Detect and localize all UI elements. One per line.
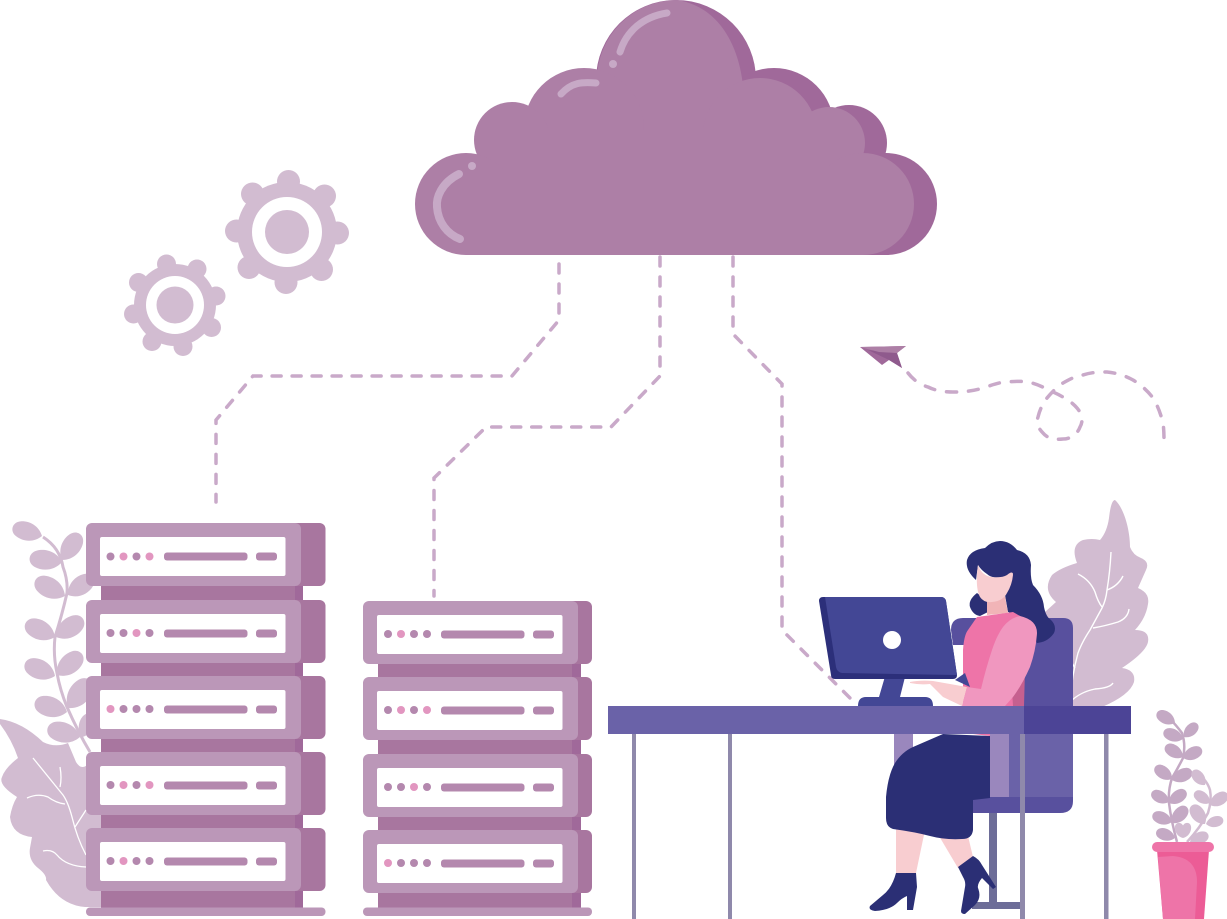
desk <box>608 706 1131 919</box>
plant: large leaf behind chair <box>1045 500 1148 707</box>
chair post and foot <box>972 810 1020 909</box>
cloud front <box>415 0 914 255</box>
potted plant <box>1149 707 1227 919</box>
left stack connector column <box>101 585 303 908</box>
plant leaves <box>1149 707 1204 844</box>
left stack base <box>86 908 326 916</box>
boot: left <box>870 873 917 911</box>
computer monitor <box>819 597 957 706</box>
middle unit 1 <box>363 601 592 664</box>
left unit 4 <box>86 752 326 815</box>
desk top left <box>608 706 1024 734</box>
monitor screen <box>825 597 957 675</box>
desk top right <box>1024 706 1131 734</box>
gear: large <box>225 170 349 294</box>
chair backrest lower <box>1009 734 1073 797</box>
gear: small <box>124 254 226 356</box>
monitor logo dot <box>883 631 901 649</box>
server stack: left <box>86 523 326 916</box>
forearm and hand <box>910 681 967 706</box>
leg: front <box>896 826 925 873</box>
chair <box>894 618 1073 909</box>
middle stack base <box>363 908 592 916</box>
face <box>977 565 1013 602</box>
left unit 3 <box>86 676 326 739</box>
plant stems <box>1169 719 1211 842</box>
pot highlight <box>1158 856 1197 919</box>
sleeve <box>962 616 1037 706</box>
blouse torso <box>963 612 1024 706</box>
chair seat <box>973 797 1073 813</box>
left unit 5 <box>86 828 326 891</box>
blouse under desk <box>973 734 990 736</box>
server stack: middle <box>363 601 592 916</box>
left unit 1 <box>86 523 326 586</box>
middle unit 4 <box>363 830 592 893</box>
monitor screen edge <box>819 597 957 679</box>
desk legs <box>632 734 1108 919</box>
plant: left large leaf <box>0 719 102 907</box>
dashed connector lines <box>216 257 850 698</box>
keyboard hint behind arm <box>955 673 970 687</box>
pot rim <box>1152 842 1214 852</box>
connector to computer <box>733 257 850 698</box>
chair light panels <box>894 734 1009 797</box>
plane trail <box>908 372 1164 442</box>
middle stack connector column <box>378 663 581 908</box>
middle unit 2 <box>363 677 592 740</box>
hair <box>967 541 1055 643</box>
chair backrest upper <box>951 618 1073 710</box>
neck <box>987 596 1008 615</box>
connector to middle server stack <box>434 257 660 596</box>
left unit 2 <box>86 600 326 663</box>
boot: right <box>958 856 996 914</box>
lower-left hair <box>970 593 990 616</box>
leg: back <box>939 836 973 868</box>
cloud highlights <box>437 13 667 239</box>
woman <box>870 541 1055 914</box>
paper plane with dashed trail <box>860 346 1164 442</box>
plant: left vine <box>10 518 98 752</box>
pot body <box>1157 850 1209 919</box>
connector to left server stack <box>216 264 559 502</box>
cloud <box>415 0 937 255</box>
monitor stand <box>858 673 933 706</box>
plane <box>860 346 906 368</box>
skirt <box>886 734 990 839</box>
cloud back shadow <box>596 0 937 255</box>
middle unit 3 <box>363 754 592 817</box>
blouse shaded side <box>1012 670 1025 706</box>
